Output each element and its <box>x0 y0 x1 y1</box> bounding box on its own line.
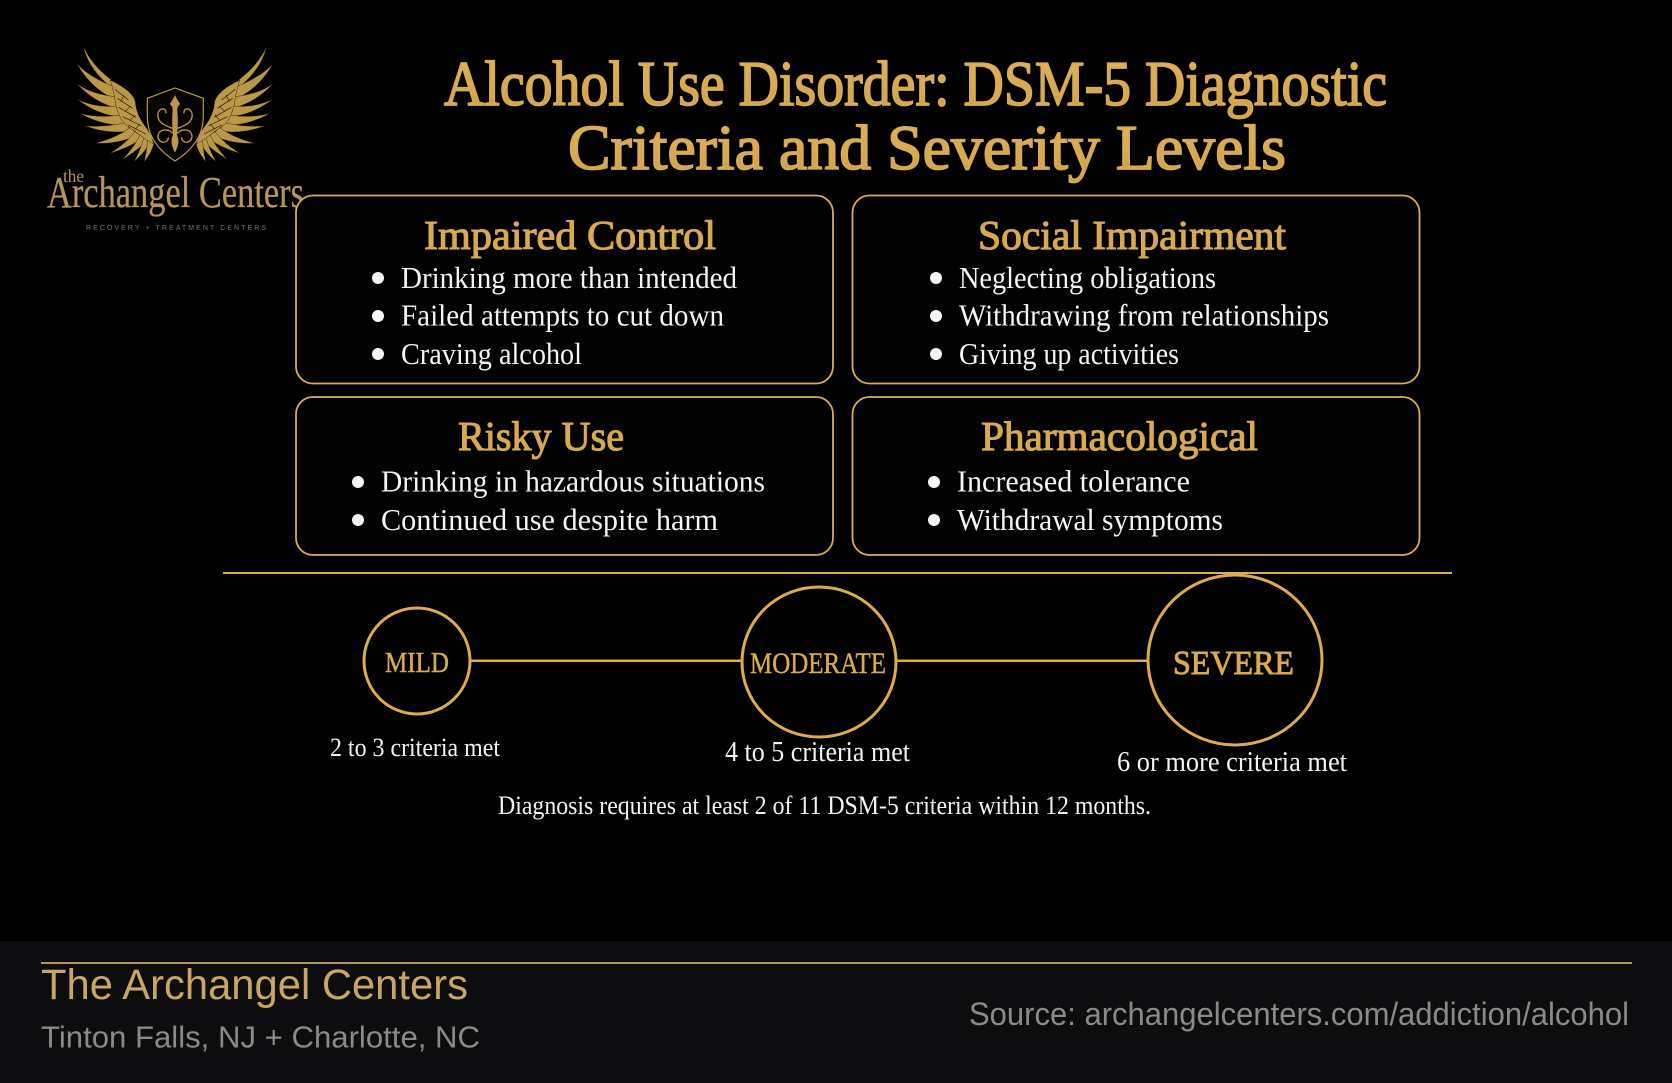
logo tagline: RECOVERY + TREATMENT CENTERS <box>86 225 266 232</box>
severity: moderate: MODERATE <box>750 647 886 680</box>
title <box>444 48 1387 183</box>
severity: moderate <box>742 587 896 737</box>
panel: Risky Use: Risky Use <box>458 413 624 459</box>
title: Criteria and Severity Levels <box>568 112 1286 183</box>
panel: Risky Use <box>296 397 833 555</box>
title: Alcohol Use Disorder: DSM-5 Diagnostic <box>444 48 1387 119</box>
logo text: Archangel Centers: Archangel Centers <box>47 168 304 217</box>
panel: Social Impairment <box>852 196 1420 384</box>
logo text: the: the <box>63 166 84 186</box>
footer: locations: Tinton Falls, NJ + Charlotte, NC <box>41 1020 480 1054</box>
caption: moderate: 4 to 5 criteria met <box>725 737 910 768</box>
panel: Risky Use: Continued use despite harm <box>381 502 718 537</box>
panel: Social Impairment: Withdrawing from relationships <box>959 298 1329 332</box>
panel: Pharmacological: Increased tolerance <box>957 464 1190 498</box>
panel: Impaired Control: Drinking more than intended <box>401 260 737 295</box>
footer background <box>0 941 1672 1083</box>
caption: severe: 6 or more criteria met <box>1117 747 1347 778</box>
caption: mild: 2 to 3 criteria met <box>330 733 501 762</box>
logo <box>47 47 304 232</box>
severity: mild <box>364 608 470 714</box>
panel: Risky Use: Drinking in hazardous situations <box>381 464 765 498</box>
panel: Pharmacological: Withdrawal symptoms <box>957 502 1223 537</box>
diagnosis note: Diagnosis requires at least 2 of 11 DSM-5 criteria within 12 months. <box>498 791 1151 820</box>
panel: Impaired Control: Failed attempts to cut down <box>401 298 724 332</box>
panel: Impaired Control <box>296 196 833 384</box>
panel: Impaired Control: Craving alcohol <box>401 336 582 371</box>
panel: Pharmacological: Pharmacological <box>981 413 1258 459</box>
severity: severe: SEVERE <box>1173 645 1294 682</box>
footer: source: Source: archangelcenters.com/addiction/alcohol <box>969 996 1629 1032</box>
severity: mild: MILD <box>385 647 449 679</box>
severity: severe <box>1148 575 1322 745</box>
panel: Social Impairment: Neglecting obligations <box>959 260 1216 295</box>
footer: organisation name: The Archangel Centers <box>41 961 468 1009</box>
panel: Social Impairment: Social Impairment <box>978 212 1287 258</box>
icon: winged shield <box>77 47 273 162</box>
severity scale <box>330 575 1347 778</box>
panel: Pharmacological <box>852 397 1420 555</box>
panel: Impaired Control: Impaired Control <box>424 212 716 258</box>
footer <box>41 961 1632 1054</box>
panel: Social Impairment: Giving up activities <box>959 336 1179 371</box>
